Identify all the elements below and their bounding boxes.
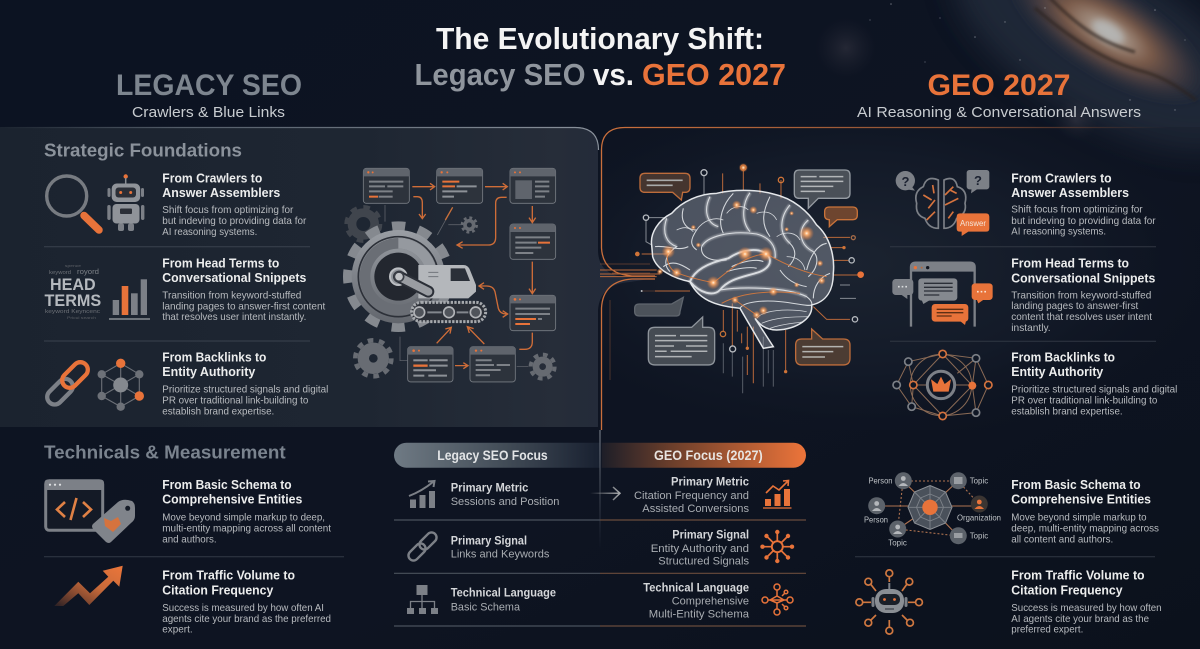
comparison row: primary signal geo: Structured Signals (658, 556, 749, 568)
comparison row: primary metric legacy: Primary Metric (451, 481, 529, 495)
icon: tag (92, 500, 135, 543)
comparison row: primary signal legacy (406, 530, 550, 563)
icon: orange hub (760, 530, 794, 563)
item text: Success is measured by how often AI (162, 603, 324, 614)
item text: Shift focus from optimizing for (162, 205, 294, 216)
item text: Entity Authority (162, 364, 256, 379)
icon: entity graph: Organization (957, 513, 1001, 523)
item text: From Traffic Volume to (162, 567, 295, 582)
comparison row: primary signal geo: Entity Authority and (651, 543, 749, 555)
item text: Comprehensive Entities (162, 492, 302, 507)
item text: deep, multi-entity mapping across (1011, 524, 1159, 535)
icon: keyword cloud: spence (65, 264, 81, 268)
main title: The Evolutionary Shift: (436, 21, 764, 56)
comparison header: legacy pill: Legacy SEO Focus (437, 447, 548, 463)
icon: entity graph (864, 472, 1001, 548)
panel frame: geo orange curves (600, 128, 1170, 430)
left item 4: schema (44, 477, 331, 545)
item text (1011, 350, 1177, 417)
main title (414, 21, 786, 92)
main title: GEO 2027 (642, 57, 786, 92)
item text: Citation Frequency (162, 582, 274, 597)
item text: expert. (162, 625, 193, 636)
comparison row: primary metric geo: Citation Frequency and (634, 490, 749, 502)
icon: entity graph: Topic (970, 475, 989, 485)
icon: entity network (98, 359, 144, 411)
item text: AI reasoning systems. (1011, 227, 1106, 238)
icon: entity graph: Topic (970, 530, 989, 540)
icon: magnifier (47, 176, 99, 230)
comparison row: technical language legacy (407, 585, 556, 614)
icon: bars (109, 279, 150, 319)
item text: Success is measured by how often (1011, 603, 1162, 614)
main title: Legacy SEO (414, 57, 586, 92)
item text: Comprehensive Entities (1011, 492, 1151, 507)
comparison arrow (590, 487, 620, 500)
item text: Transition from keyword-stuffed (1011, 290, 1152, 301)
left item 3: backlinks (44, 350, 328, 417)
comparison row: primary signal geo: Primary Signal (672, 528, 749, 542)
comparison row: primary signal legacy: Primary Signal (451, 533, 527, 547)
comparison row: primary metric geo: Primary Metric (671, 475, 749, 489)
item text: Transition from keyword-stuffed (162, 290, 302, 302)
item text: Move beyond simple markup to (1011, 513, 1147, 524)
panel: right background (601, 127, 1200, 430)
item text: Shift focus from optimizing for (1011, 205, 1143, 216)
item text: From Traffic Volume to (1011, 567, 1145, 582)
item text: Conversational Snippets (1011, 270, 1155, 285)
item text: From Crawlers to (162, 170, 262, 185)
item text: and authors. (162, 534, 217, 545)
icon: chain link (44, 359, 91, 408)
item text (1011, 256, 1155, 334)
item text: landing pages to answer-first content (162, 302, 325, 312)
item text: Citation Frequency (1011, 582, 1123, 597)
main gear (348, 226, 449, 327)
icon: keyword cloud (44, 264, 101, 320)
speech bubbles (635, 170, 857, 365)
item text: From Backlinks to (1011, 350, 1115, 365)
item text: From Head Terms to (1011, 256, 1129, 271)
comparison header: geo pill: GEO Focus (2027) (654, 447, 763, 463)
glowing neurons (657, 200, 826, 319)
geo heading: AI Reasoning & Conversational Answers (857, 105, 1141, 121)
icon: entity graph: Person (864, 515, 888, 525)
item text: Move beyond simple markup to deep, (162, 513, 325, 524)
comparison row: technical language geo: Comprehensive (672, 596, 749, 608)
icon: reasoning brain: Answer (960, 219, 986, 228)
galaxy backdrop (816, 0, 1200, 195)
item text: multi-entity mapping across all content (162, 524, 331, 535)
comparison row: technical language geo: Multi-Entity Schema (649, 609, 750, 621)
item text: Prioritize structured signals and digital (1011, 384, 1177, 395)
crawler truck (394, 265, 486, 322)
illustration: AI brain with speech bubbles (600, 163, 864, 393)
item text: establish brand expertise. (162, 406, 274, 417)
item text: PR over traditional link-building to (1011, 395, 1157, 406)
legacy heading: Crawlers & Blue Links (132, 105, 285, 121)
item text: From Basic Schema to (1011, 477, 1141, 492)
icon: entity graph: Person (868, 475, 893, 485)
right item 2: snippets (892, 256, 1155, 334)
icon: code window (44, 480, 104, 530)
icon: crown network (893, 350, 992, 420)
item text: but indeving to providing data for (1011, 216, 1156, 227)
icon: reasoning brain (896, 170, 989, 236)
comparison header: legacy pill (394, 443, 600, 468)
section heading: strategic foundations: Strategic Foundations (44, 140, 242, 161)
cards (363, 168, 556, 382)
left item 1: crawlers (47, 170, 307, 238)
item text: AI reasoning systems. (162, 227, 257, 238)
icon: bar growth (409, 481, 435, 508)
comparison row: primary metric geo: Assisted Conversions (642, 503, 749, 515)
brain (651, 190, 834, 348)
right item 1: crawlers (896, 170, 1156, 238)
orange flow arrows (412, 183, 536, 369)
item text: all content and authors. (1011, 534, 1113, 545)
item text: content that resolves user intent (1011, 312, 1152, 323)
item text: landing pages to answer-first (1011, 301, 1138, 312)
icon: hierarchy (407, 585, 438, 614)
icon: chat window (892, 263, 993, 327)
comparison row: primary metric legacy: Sessions and Position (451, 496, 559, 508)
item text: Entity Authority (1011, 364, 1104, 379)
icon: reasoning brain: ? (974, 173, 982, 188)
item text (162, 477, 331, 545)
icon: keyword cloud: keyword Keyncenc (45, 309, 100, 315)
item text: Prioritize structured signals and digital (162, 385, 328, 396)
icon: keyword cloud: keyword (49, 270, 71, 276)
item text: instantly. (1011, 323, 1051, 334)
item text: establish brand expertise. (1011, 406, 1123, 417)
item text: Conversational Snippets (162, 270, 306, 285)
item text: From Crawlers to (1011, 170, 1112, 185)
item text (1011, 477, 1159, 545)
icon: entity graph: Topic (888, 538, 907, 548)
illustration: crawler machine and page flow (347, 168, 556, 382)
item text: agents cite your brand as the preferred (162, 614, 331, 625)
comparison row: primary metric legacy (409, 481, 559, 508)
item text (162, 256, 325, 323)
item text: Answer Assemblers (162, 185, 280, 200)
item text: From Head Terms to (162, 256, 279, 271)
geo heading (857, 69, 1141, 121)
legacy heading: LEGACY SEO (116, 69, 302, 102)
panel: legacy upper background (0, 127, 655, 427)
comparison row: technical language legacy: Technical Language (451, 586, 556, 600)
circuit lines (600, 168, 858, 393)
circuit nodes (635, 163, 864, 373)
comparison row: primary metric geo (634, 475, 792, 515)
item text: Answer Assemblers (1011, 185, 1129, 200)
icon: keyword cloud: royord (77, 269, 99, 276)
section heading: technicals and measurement: Technicals & Measurement (44, 441, 286, 462)
comparison row: primary signal legacy: Links and Keywords (451, 549, 550, 561)
item text (162, 567, 331, 636)
item text: AI agents cite your brand as the (1011, 614, 1149, 625)
icon: reasoning brain: ? (902, 174, 910, 189)
icon: keyword cloud: HEAD (50, 275, 96, 294)
icon: crawler robot (107, 174, 144, 231)
item text: From Basic Schema to (162, 477, 292, 492)
item text (1011, 170, 1156, 238)
comparison row: technical language geo: Technical Language (643, 581, 749, 595)
right item 4: entities (864, 472, 1159, 548)
right item 3: authority (893, 350, 1177, 420)
geo heading: GEO 2027 (928, 69, 1070, 102)
main title: vs. (593, 57, 634, 92)
item text: preferred expert. (1011, 625, 1083, 636)
comparison header: geo pill (602, 443, 806, 468)
small gears (347, 205, 555, 379)
icon: robot with satellites (856, 570, 922, 634)
left item 5: traffic (54, 566, 331, 636)
item text: but indeving to providing data for (162, 216, 307, 227)
item text: that resolves user intent instantly. (162, 312, 306, 323)
panel frame: legacy (0, 128, 598, 150)
item text: From Backlinks to (162, 350, 266, 365)
comparison row: technical language legacy: Basic Schema (451, 601, 521, 613)
icon: link (406, 530, 439, 563)
icon: trend arrow (54, 566, 123, 606)
item text: PR over traditional link-building to (162, 396, 308, 406)
left item 2: head terms (44, 256, 325, 323)
item text (162, 350, 328, 417)
right item 5: citation (856, 567, 1162, 636)
icon: keyword cloud: Pricul search (67, 315, 96, 320)
icon: keyword cloud: TERMS (44, 291, 101, 310)
legacy heading (116, 69, 302, 121)
icon: orange network (762, 584, 793, 615)
comparison row: technical language geo (643, 581, 793, 621)
comparison row: primary signal geo (651, 528, 794, 568)
item text (1011, 567, 1162, 636)
icon: orange chart (763, 480, 792, 508)
item text (162, 170, 307, 238)
